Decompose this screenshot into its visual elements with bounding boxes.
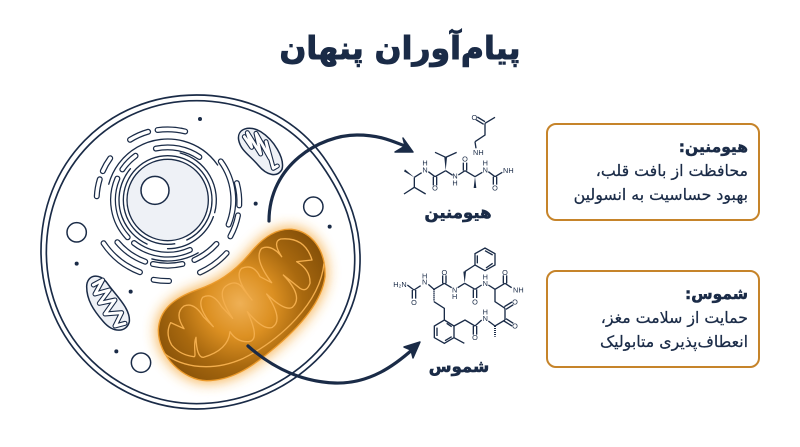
cell diagram (41, 88, 360, 409)
atom labels: NH (473, 148, 484, 157)
cytoplasm dots (75, 117, 332, 353)
atom labels: O (512, 297, 518, 306)
text: humanin benefit line 1: محافظت از بافت قلب، (596, 161, 748, 180)
benzene ring (475, 248, 495, 271)
atom labels: O (472, 333, 478, 342)
small mitochondrion, top right (238, 128, 282, 175)
atom labels: NH (503, 166, 514, 175)
atom labels: O (462, 154, 468, 163)
atom labels: H (483, 308, 488, 317)
small mitochondrion, bottom left (87, 276, 129, 330)
atom labels: NH (513, 285, 524, 294)
atom labels: N (483, 165, 488, 174)
arrow: mitochondrion to MOTS-c (248, 342, 420, 383)
atom labels: N (483, 279, 488, 288)
title: پیام‌آوران پنهان (280, 31, 520, 67)
atom labels: H (422, 159, 428, 168)
atom labels: N (422, 278, 427, 287)
endoplasmic reticulum (56, 88, 280, 312)
label: humanin: هیومنین (424, 203, 492, 222)
atom labels: O (472, 298, 478, 307)
atom labels: O (432, 184, 438, 193)
highlighted large mitochondrion (158, 229, 325, 381)
atom labels: N (422, 165, 428, 174)
molecule: MOTS-c (393, 248, 524, 343)
cell membrane (41, 95, 360, 409)
atom labels: H (483, 273, 488, 282)
heading: humanin: هیومنین: (679, 138, 748, 156)
vesicles (67, 197, 323, 372)
panel: MOTS-c benefits (546, 270, 760, 368)
aromatic ring (434, 320, 454, 343)
atom labels: H (422, 272, 427, 281)
atom labels: O (471, 113, 477, 122)
atom labels: H (452, 292, 457, 301)
panel: humanin benefits (546, 123, 760, 221)
atom labels: H (452, 179, 458, 188)
atom labels: O (512, 321, 518, 330)
single membrane lines (84, 117, 251, 283)
text: MOTS-c benefit line 1: حمایت از سلامت مغز، (601, 308, 748, 327)
atom labels: O (502, 268, 508, 277)
atom labels: N (483, 314, 488, 323)
text: humanin benefit line 2: بهبود حساسیت به انسولین (574, 185, 748, 204)
atom labels: H₂N (393, 280, 407, 289)
atom labels (422, 113, 514, 193)
atom labels: O (441, 268, 447, 277)
atom labels: N (452, 171, 458, 180)
heading: MOTS-c: شموس: (685, 285, 748, 303)
arrow: mitochondrion to humanin (269, 135, 413, 221)
atom labels: H (483, 158, 488, 167)
atom labels: O (492, 184, 498, 193)
text: MOTS-c benefit line 2: انعطاف‌پذیری متابولیک (600, 332, 748, 351)
label: MOTS-c: شموس (429, 357, 489, 376)
nucleus (123, 156, 212, 244)
atom labels: O (411, 298, 417, 307)
atom labels: N (452, 285, 457, 294)
molecule: humanin (404, 113, 514, 194)
atom labels (393, 268, 524, 342)
